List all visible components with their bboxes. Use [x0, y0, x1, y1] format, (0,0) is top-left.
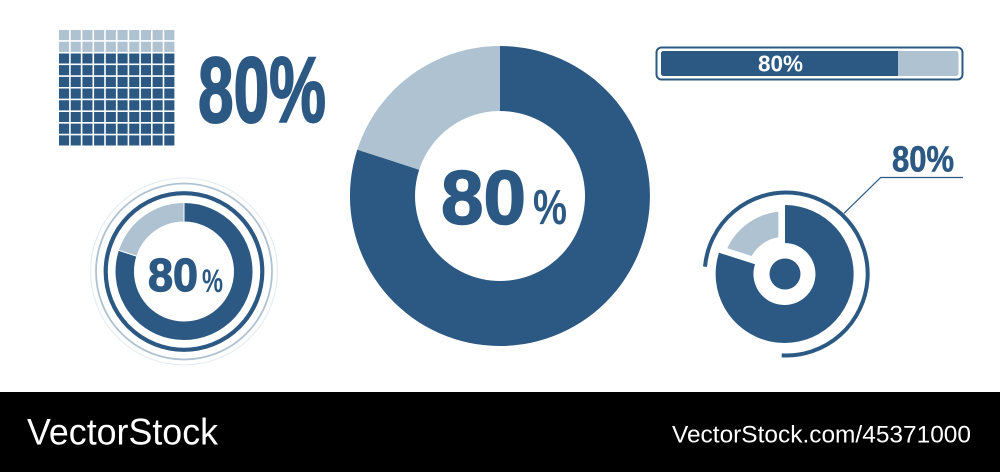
- footer url: VectorStock.com/45371000: [672, 422, 971, 448]
- offset donut chart: [705, 193, 868, 356]
- ringed donut label: %: [202, 263, 223, 299]
- progress bar: [656, 48, 962, 80]
- footer bar: [0, 392, 1000, 472]
- waffle chart: [59, 35, 175, 140]
- leader line: [844, 178, 963, 213]
- ringed donut label: 80: [148, 249, 198, 301]
- progress bar label: 80%: [758, 50, 803, 76]
- large donut chart: [350, 46, 650, 346]
- ringed donut chart: [90, 178, 278, 365]
- waffle percentage label: 80%: [198, 38, 326, 142]
- footer logo: VectorStock: [27, 412, 218, 452]
- ringed donut label: [148, 249, 223, 301]
- large donut label: 80: [441, 156, 526, 241]
- large donut label: [441, 156, 567, 241]
- large donut label: %: [533, 181, 567, 235]
- offset donut label: 80%: [892, 138, 954, 180]
